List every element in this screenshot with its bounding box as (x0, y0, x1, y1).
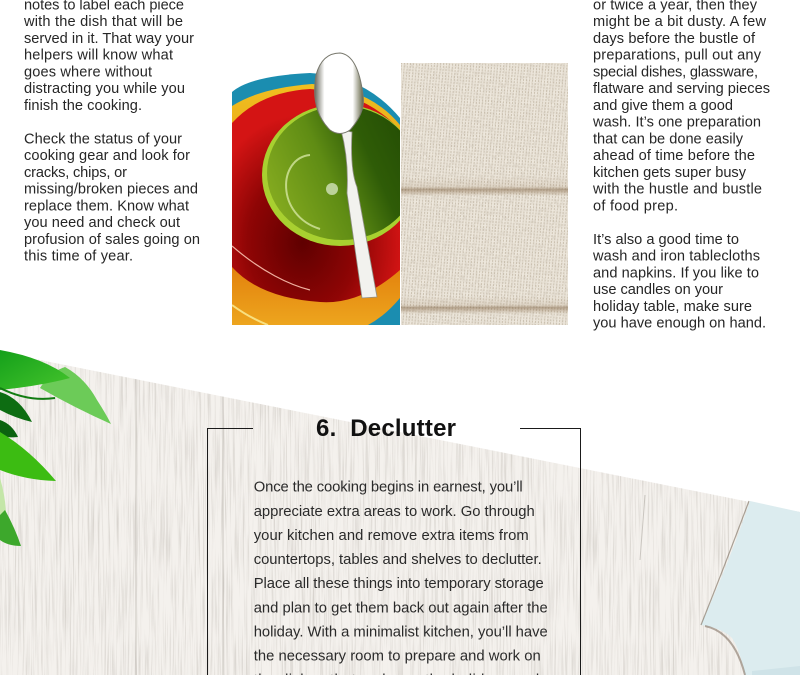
left text column: missing/broken pieces and (24, 182, 198, 198)
left text column: goes where without (24, 64, 152, 80)
declutter body text: your kitchen and remove extra items from (254, 528, 529, 544)
right text column: wash and iron tablecloths (592, 248, 760, 264)
right text column: kitchen gets super busy (593, 165, 747, 181)
photo: folded linen napkins (401, 63, 568, 325)
left text column: distracting you while you (24, 81, 185, 97)
left text column: this time of year. (24, 248, 133, 264)
yellow plate (232, 84, 400, 325)
icon: green leaves (0, 350, 111, 546)
right text column: of food prep. (593, 198, 678, 214)
right text column: with the hustle and bustle (592, 182, 762, 198)
right text column: and napkins. If you like to (593, 265, 759, 281)
left text column: profusion of sales going on (24, 232, 200, 248)
wood background panel (0, 350, 800, 675)
right text column: ahead of time before the (593, 148, 755, 164)
right text column: you have enough on hand. (593, 316, 766, 332)
right text column: wash. It’s one preparation (592, 114, 761, 130)
left text column: helpers will know what (24, 48, 173, 64)
blue napkin corner (701, 501, 800, 675)
declutter body text: the necessary room to prepare and work on (254, 648, 541, 664)
left text column (23, 0, 200, 265)
blue plate (232, 73, 400, 325)
left text column: cooking gear and look for (24, 148, 190, 164)
left text column: you need and check out (24, 215, 180, 231)
left text column: served in it. That way your (24, 31, 194, 47)
right text column: preparations, pull out any (593, 48, 762, 64)
cup interior highlight (286, 155, 320, 229)
declutter body text: and plan to get them back out again after the (254, 600, 548, 616)
declutter body text: appreciate extra areas to work. Go through (254, 504, 535, 520)
yellow plate highlight (232, 305, 268, 325)
left text column: replace them. Know what (24, 198, 189, 214)
declutter body text (254, 480, 548, 675)
green cup (262, 107, 400, 246)
section frame (208, 428, 580, 675)
right text column: might be a bit dusty. A few (593, 14, 766, 30)
right text column: flatware and serving pieces (593, 81, 770, 97)
red plate (232, 89, 400, 302)
declutter body text: Place all these things into temporary storage (254, 576, 544, 592)
right text column: that can be done easily (593, 131, 744, 147)
declutter body text: Once the cooking begins in earnest, you’ll (254, 480, 523, 496)
heading: 6. Declutter: 6. Declutter (316, 415, 456, 442)
right text column: days before the bustle of (593, 31, 756, 47)
red plate highlight (232, 246, 310, 290)
photo: colourful plates and cup with spoon (232, 53, 418, 325)
left text column: with the dish that will be (23, 14, 183, 30)
right text column: special dishes, glassware, (593, 64, 758, 80)
right text column (592, 0, 770, 332)
spoon (315, 53, 377, 298)
declutter body text: countertops, tables and shelves to declutter. (254, 552, 542, 568)
left text column: finish the cooking. (24, 98, 142, 114)
right text column: and give them a good (593, 98, 733, 114)
left text column: Check the status of your (24, 131, 182, 147)
right text column: holiday table, make sure (593, 299, 752, 315)
declutter body text: holiday. With a minimalist kitchen, you’ll have (254, 624, 548, 640)
left text column: cracks, chips, or (24, 165, 127, 181)
right text column: It’s also a good time to (593, 232, 739, 248)
right text column: use candles on your (593, 282, 723, 298)
